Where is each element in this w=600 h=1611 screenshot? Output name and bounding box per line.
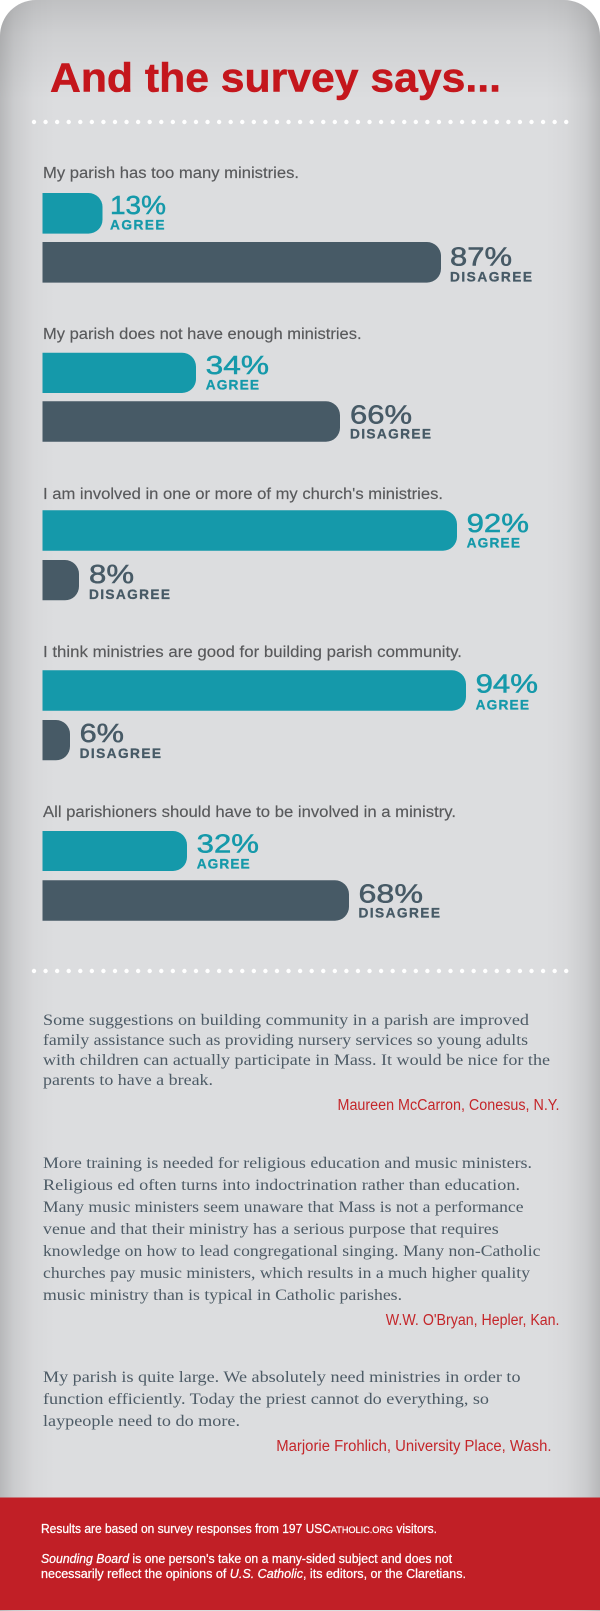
- disagree label 6%: DISAGREE: [80, 746, 161, 761]
- panel: question 2: [42, 326, 431, 442]
- quote text: parents to have a break.: [43, 1072, 213, 1089]
- footer note: disclaimer: necessarily reflect the opinions of U.S. Catholic, its editors, or the Claretians.: [41, 1567, 466, 1581]
- agree label 13%: [110, 190, 166, 233]
- agree label 32%: AGREE: [197, 856, 250, 871]
- agree label 32%: [197, 828, 259, 871]
- agree label 32%: 32%: [197, 828, 259, 858]
- disagree label 8%: DISAGREE: [89, 587, 170, 602]
- disagree label 6%: 6%: [80, 718, 124, 748]
- agree label 94%: AGREE: [476, 697, 529, 712]
- quote text: laypeople need to do more.: [43, 1413, 240, 1430]
- panel: question 4: [42, 644, 538, 761]
- agree label 92%: 92%: [467, 508, 529, 538]
- quote text: [43, 1155, 540, 1304]
- disagree label 8%: 8%: [89, 559, 134, 589]
- agree label 94%: [476, 669, 538, 712]
- quote text: More training is needed for religious education and music ministers.: [43, 1155, 532, 1172]
- quote text: music ministry than is typical in Catholic parishes.: [43, 1287, 402, 1304]
- quote text: Many music ministers seem unaware that Mass is not a performance: [43, 1199, 524, 1216]
- comment 1: [43, 1012, 560, 1114]
- question text: I am involved in one or more of my church's ministries.: [43, 486, 443, 503]
- attribution: Maureen McCarron, Conesus, N.Y.: [338, 1097, 560, 1114]
- quote text: with children can actually participate in Mass. It would be nice for the: [43, 1052, 550, 1069]
- disagree bar 68%: [42, 880, 349, 921]
- comment 2: [43, 1155, 560, 1329]
- agree bar 34%: [42, 353, 196, 393]
- agree bar 92%: [42, 510, 457, 551]
- disagree label 66%: 66%: [350, 400, 412, 430]
- quote text: [43, 1012, 550, 1089]
- agree label 13%: AGREE: [110, 218, 164, 233]
- quote text: venue and that their ministry has a serious purpose that requires: [43, 1221, 499, 1238]
- disagree label 68%: DISAGREE: [358, 906, 440, 921]
- disagree label 68%: 68%: [358, 878, 423, 908]
- quote text: Some suggestions on building community in a parish are improved: [43, 1012, 529, 1029]
- panel: question 1: [42, 165, 532, 285]
- attribution: W.W. O'Bryan, Hepler, Kan.: [386, 1312, 560, 1329]
- disagree bar 6%: [42, 720, 70, 760]
- title: And the survey says...: [50, 55, 501, 101]
- disagree label 6%: [80, 718, 161, 761]
- agree bar 13%: [42, 193, 102, 234]
- disagree bar 8%: [42, 560, 79, 600]
- comment 3: [43, 1369, 552, 1455]
- question text: I think ministries are good for building parish community.: [43, 644, 462, 661]
- quote text: family assistance such as providing nursery services so young adults: [43, 1032, 528, 1049]
- attribution: Marjorie Frohlich, University Place, Wash.: [276, 1438, 552, 1455]
- quote text: function efficiently. Today the priest cannot do everything, so: [43, 1391, 489, 1408]
- quote text: My parish is quite large. We absolutely need ministries in order to: [43, 1369, 520, 1386]
- agree label 92%: AGREE: [467, 535, 520, 550]
- agree bar 94%: [42, 670, 466, 711]
- agree bar 32%: [42, 831, 187, 871]
- disagree label 66%: [350, 400, 431, 442]
- panel: question 5: [42, 804, 456, 921]
- footer note: disclaimer: [41, 1552, 466, 1581]
- footer note: disclaimer: Sounding Board is one person's take on a many-sided subject and does not: [41, 1552, 453, 1566]
- disagree label 8%: [89, 559, 170, 602]
- question text: All parishioners should have to be involved in a ministry.: [43, 804, 456, 821]
- agree label 34%: 34%: [206, 350, 269, 380]
- agree label 92%: [467, 508, 529, 550]
- agree label 34%: [206, 350, 269, 393]
- disagree bar 87%: [42, 242, 441, 283]
- quote text: [43, 1369, 520, 1430]
- disagree bar 66%: [42, 401, 340, 442]
- agree label 34%: AGREE: [206, 378, 259, 393]
- disagree label 66%: DISAGREE: [350, 427, 431, 442]
- quote text: churches pay music ministers, which results in a much higher quality: [43, 1265, 530, 1282]
- agree label 13%: 13%: [110, 190, 166, 220]
- panel: question 3: [42, 486, 529, 602]
- question text: My parish has too many ministries.: [43, 165, 299, 182]
- disagree label 87%: 87%: [450, 242, 512, 272]
- footer band: [0, 1498, 600, 1610]
- quote text: Religious ed often turns into indoctrination rather than education.: [43, 1177, 520, 1194]
- disagree label 68%: [358, 878, 440, 921]
- question text: My parish does not have enough ministries.: [43, 326, 362, 343]
- agree label 94%: 94%: [476, 669, 538, 699]
- disagree label 87%: DISAGREE: [450, 270, 532, 285]
- disagree label 87%: [450, 242, 532, 285]
- quote text: knowledge on how to lead congregational singing. Many non-Catholic: [43, 1243, 540, 1260]
- footer note: survey responses: Results are based on survey responses from 197 USCATHOLIC.ORG visitors.: [41, 1522, 437, 1536]
